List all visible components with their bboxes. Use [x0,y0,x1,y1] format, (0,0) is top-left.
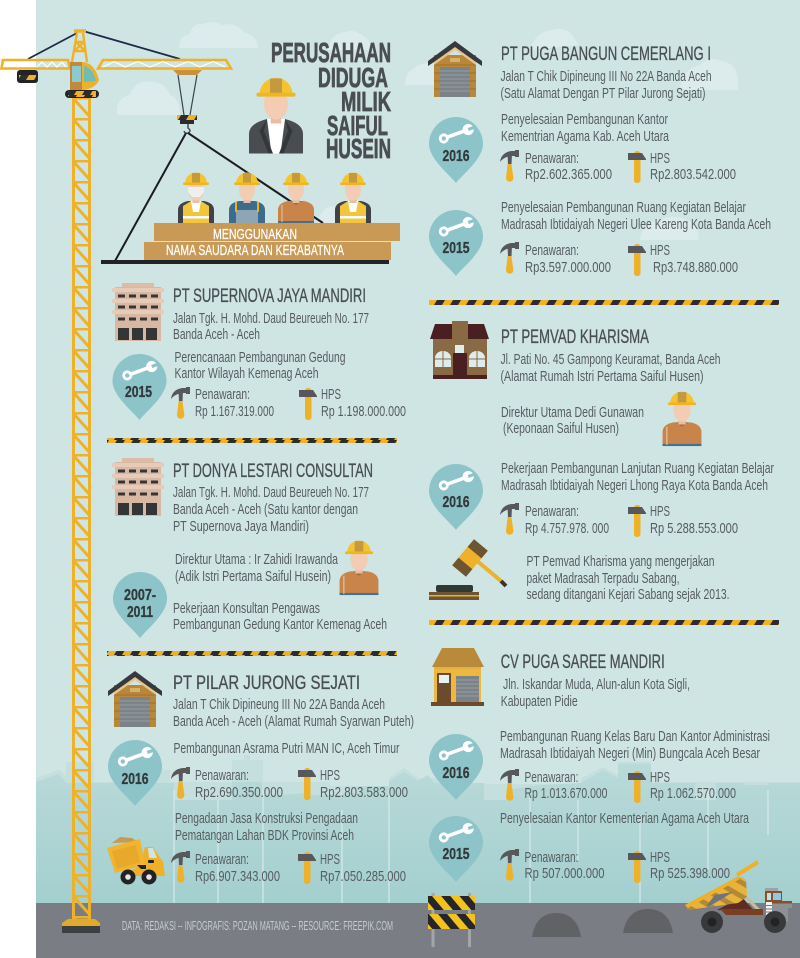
director: Direktur Utama : Ir Zahidi Irawanda [175,551,338,568]
year pin 2007-2011 [113,572,167,638]
project 1: Penyelesaian Pembangunan Kantor [501,111,668,128]
bid 1: Rp2.690.350.000 [195,784,283,801]
icon: garage [108,671,162,727]
year pin 2016: 2016 [442,765,470,782]
address [501,676,690,710]
bid [171,386,274,420]
tower crane [2,31,323,933]
bid: Rp 4.757.978. 000 [525,520,609,537]
HPS [628,503,738,537]
HPS: Rp 1.198.000.000 [321,403,406,420]
HPS 1: HPS [650,150,670,167]
court case note [526,553,730,603]
project [501,460,774,494]
title: DIDUGA [318,62,388,93]
project 2 [175,810,358,844]
HPS 2: HPS [650,849,670,866]
project [173,600,387,633]
panel: PT Pilar Jurong Sejati [107,671,414,885]
figure: Saiful Husein in suit [249,78,303,154]
director [501,404,644,437]
HPS 2: Rp7.050.285.000 [320,868,406,885]
icon: house [430,321,489,379]
address: Jln. Iskandar Muda, Alun-alun Kota Sigli, [503,676,690,693]
icon: road barrier [428,893,475,947]
heading: PT PUGA BANGUN CEMERLANG I [501,44,711,65]
footer credits: DATA: REDAKSI -- INFOGRAFIS: POZAN MATANG -- RESOURCE: FREEPIK.COM [122,918,393,933]
panel: CV Puga Saree Mandiri [429,648,770,883]
icon: mixer truck [107,837,165,884]
HPS [299,386,406,420]
bid 2 [500,849,604,882]
icon: worker [663,392,701,446]
wooden planks banner: NAMA SAUDARA DAN KERABATNYA [166,242,344,259]
year pin 2016: 2016 [122,771,149,788]
HPS 1: Rp2.803.542.000 [650,166,736,183]
HPS 2: HPS [650,242,670,259]
icon: garage [428,41,482,97]
address [173,484,369,535]
wooden planks banner [101,223,400,264]
city skyline silhouette front layer [36,764,800,903]
title: HUSEIN [326,133,391,164]
address: Banda Aceh - Aceh (Satu kantor dengan [173,501,358,518]
address: Jalan Tgk. H. Mohd. Daud Beureueh No. 177 [173,484,369,501]
bid 1: Rp 1.013.670.000 [524,785,608,802]
bid 2: Penawaran: [195,851,249,868]
icon: office building [112,458,164,516]
bid 1 [171,767,283,801]
bid 1: Penawaran: [525,150,579,167]
HPS 2: Rp 525.398.000 [650,865,730,882]
address [500,68,712,102]
HPS 1 [628,150,736,183]
bid [500,503,609,537]
bid 2: Rp6.907.343.000 [195,868,280,885]
panel: PT Supernova Jaya Mandiri [112,283,406,420]
year pin 2016 [108,740,162,806]
heading: PT PILAR JURONG SEJATI [173,673,360,694]
year pin 2007-2011: 2011 [127,604,153,621]
bid 2: Penawaran: [524,849,578,866]
year pin 2015: 2015 [125,384,152,401]
bid 2: Rp3.597.000.000 [525,259,611,276]
HPS 2 [298,851,406,885]
bid: Penawaran: [525,503,579,520]
HPS: HPS [321,386,341,403]
icon: worker [340,541,378,595]
icon: office building [112,283,164,341]
HPS: Rp 5.288.553.000 [650,520,738,537]
HPS 2: Rp3.748.880.000 [653,259,738,276]
title: SAIFUL [327,110,388,141]
address [173,310,369,343]
heading: PT DONYA LESTARI CONSULTAN [173,461,373,482]
heading: PT PEMVAD KHARISMA [501,327,649,348]
ground [36,903,800,958]
HPS 1 [628,769,736,803]
bid 2 [171,851,280,885]
bid 2: Rp 507.000.000 [524,865,604,882]
year pin 2016: 2016 [442,494,470,511]
HPS 1: HPS [650,769,670,786]
icon: gavel [429,539,506,600]
address: Banda Aceh - Aceh [173,326,260,343]
bid 1: Penawaran: [524,769,578,786]
title [271,37,391,164]
HPS 1: Rp 1.062.570.000 [650,785,736,802]
heading: PT SUPERNOVA JAYA MANDIRI [173,286,366,307]
HPS 1 [298,767,408,801]
project: Perencanaan Pembangunan Gedung [174,349,346,366]
bid 1 [500,150,612,183]
address: Jalan T Chik Dipineung III No 22A Banda Aceh [173,696,385,713]
icon: dump truck [685,862,792,933]
workers group [178,172,371,223]
court case note: paket Madrasah Terpadu Sabang, [526,570,680,587]
background clouds [117,22,738,240]
address: (Alamat Rumah Istri Pertama Saiful Husen) [500,368,704,385]
year pin 2015 [112,354,166,420]
HPS 2 [628,849,730,883]
year pin 2016 [429,464,483,530]
project 2: Pematangan Lahan BDK Provinsi Aceh [175,827,354,844]
year pin 2016 [429,734,483,800]
address: Banda Aceh - Aceh (Alamat Rumah Syarwan Puteh) [173,713,414,730]
bid: Rp 1.167.319.000 [195,403,274,420]
year pin 2007-2011: 2007- [124,587,156,604]
year pin 2015: 2015 [442,240,470,257]
project 1: Kementrian Agama Kab. Aceh Utara [501,128,669,145]
director: (Adik Istri Pertama Saiful Husein) [175,568,331,585]
project 1 [500,728,770,762]
project: Kantor Wilayah Kemenag Aceh [174,365,318,382]
title: PERUSAHAAN [271,37,391,68]
court case note: PT Pemvad Kharisma yang mengerjakan [526,553,714,570]
address: (Satu Alamat Dengan PT Pilar Jurong Sejati) [500,85,706,102]
title: MILIK [341,86,391,117]
bid 1 [500,769,608,802]
project 2: Pengadaan Jasa Konstruksi Pengadaan [175,810,358,827]
year pin 2015: 2015 [442,846,470,863]
HPS 1: Rp2.803.583.000 [320,784,408,801]
address: Kabupaten Pidie [501,693,578,710]
panel: PT Pemvad Kharisma [429,321,774,603]
bid: Penawaran: [195,386,250,403]
year pin 2015 [429,210,483,276]
project 1: Pembangunan Asrama Putri MAN IC, Aceh Timur [174,740,400,757]
HPS 1: HPS [320,767,340,784]
HPS 2 [628,242,738,276]
director: Direktur Utama Dedi Gunawan [501,404,644,421]
panel: PT Puga Bangun Cemerlang I [428,41,771,276]
wooden planks banner: MENGGUNAKAN [213,226,297,243]
bid 1: Rp2.602.365.000 [525,166,612,183]
heading: CV PUGA SAREE MANDIRI [501,652,665,673]
icon: shop house [431,648,484,706]
city skyline silhouette back layer [36,755,800,903]
address: PT Supernova Jaya Mandiri) [173,518,309,535]
HPS 2: HPS [320,851,340,868]
project 1 [501,111,669,145]
gravel mounds [532,909,673,937]
project 2 [501,199,771,233]
address: Jalan Tgk. H. Mohd. Daud Beureueh No. 177 [173,310,369,327]
year pin 2015 [429,816,483,882]
year pin 2016: 2016 [442,148,470,165]
HPS: HPS [650,503,670,520]
panel: PT Donya Lestari Consultan [112,458,387,638]
director [175,551,338,585]
director: (Keponaan Saiful Husen) [503,420,619,437]
address [500,351,720,385]
bid 1: Penawaran: [195,767,249,784]
project: Pekerjaan Konsultan Pengawas [173,600,320,617]
project [174,349,346,382]
project: Pembangunan Gedung Kantor Kemenag Aceh [173,616,387,633]
address [173,696,414,730]
bid 2 [500,242,611,276]
year pin 2016 [429,117,483,183]
bid 2: Penawaran: [525,242,579,259]
